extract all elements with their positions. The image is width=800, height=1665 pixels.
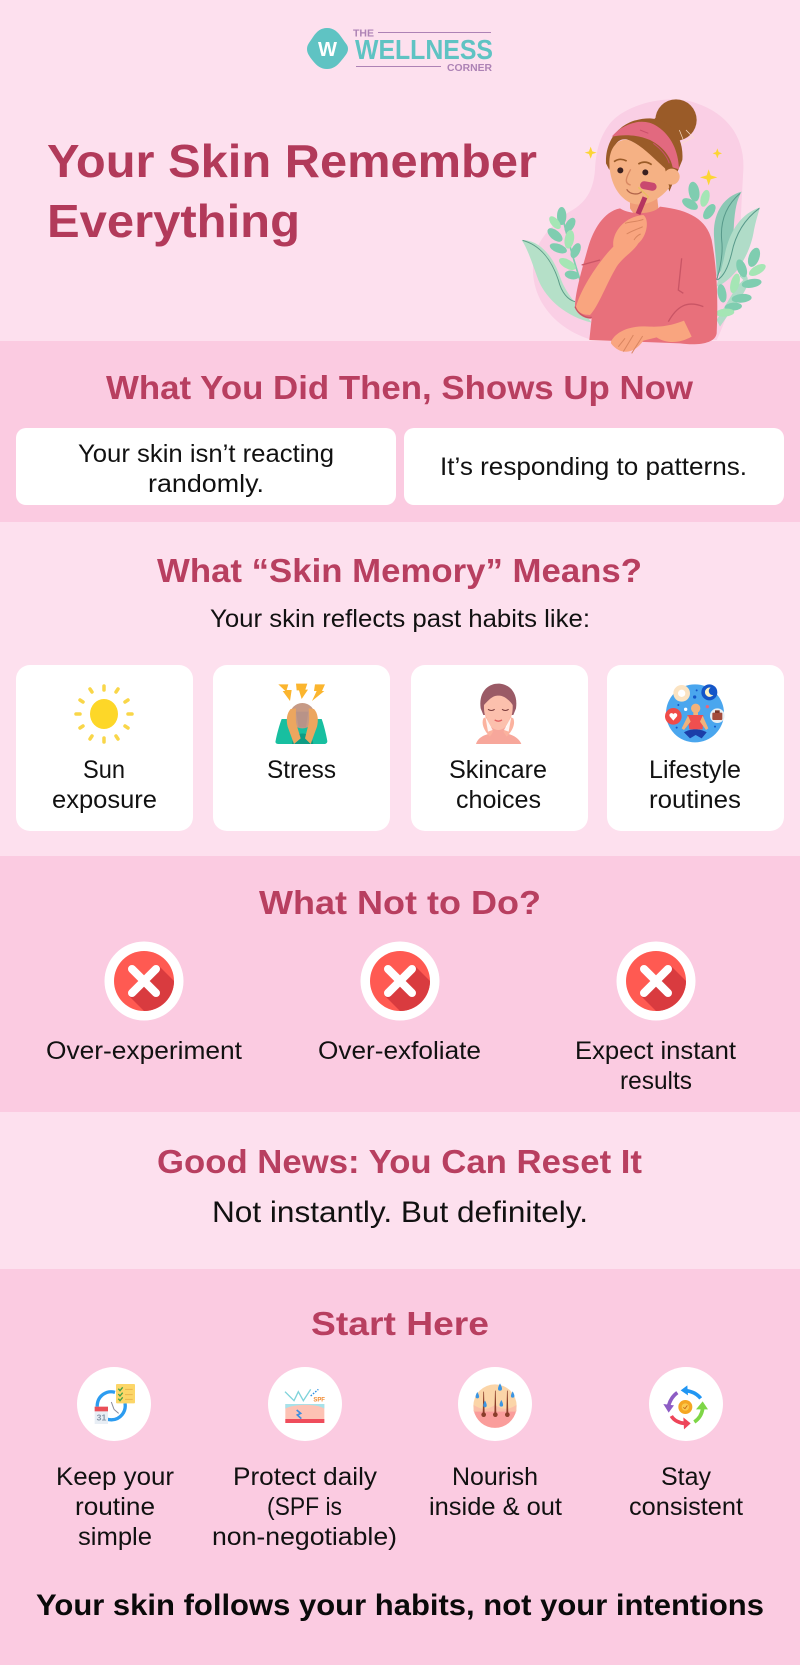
lower hand xyxy=(611,321,692,352)
icon: cross xyxy=(616,942,696,1020)
icon: stressed person xyxy=(275,684,327,744)
heading: Start Here xyxy=(311,1305,489,1342)
logo: The Wellness Corner: WELLNESS xyxy=(355,34,493,65)
card: lifestyle routines: Lifestyle xyxy=(649,756,741,784)
panel: what you did then xyxy=(0,341,800,522)
callout: reacting randomly: Your skin isn’t reacting xyxy=(78,440,334,468)
blob background xyxy=(533,99,743,340)
panel: skin memory xyxy=(0,522,800,856)
card: skincare choices: choices xyxy=(456,786,541,814)
step: stay consistent xyxy=(629,1367,743,1521)
title: Everything xyxy=(47,195,300,247)
panel: what not to do xyxy=(0,856,800,1112)
illustration: woman using face roller xyxy=(522,99,768,353)
step: nourish xyxy=(429,1367,562,1521)
icon: cross xyxy=(104,942,184,1020)
item: expect instant results xyxy=(575,942,736,1095)
card: sun exposure: exposure xyxy=(52,786,157,814)
card: stress: Stress xyxy=(267,756,336,784)
item: over-experiment xyxy=(46,942,242,1065)
card: lifestyle routines: routines xyxy=(649,786,741,814)
hair bun xyxy=(650,99,697,160)
panel: header xyxy=(0,0,800,341)
item: over-exfoliate: Over-exfoliate xyxy=(318,1037,481,1065)
face roller xyxy=(638,181,657,214)
card: stress xyxy=(213,665,390,831)
heading: What You Did Then, Shows Up Now xyxy=(106,369,693,406)
arm and hand xyxy=(576,215,647,315)
step: nourish: inside & out xyxy=(429,1493,562,1521)
step: protect daily: non-negotiable) xyxy=(212,1523,397,1551)
heading: Good News: You Can Reset It xyxy=(157,1143,642,1180)
icon: face care xyxy=(476,684,521,744)
step: keep routine simple: routine xyxy=(75,1493,155,1521)
item: expect instant results: results xyxy=(620,1067,692,1095)
step: protect daily: Protect daily xyxy=(233,1463,378,1491)
item: over-exfoliate xyxy=(318,942,481,1065)
closing statement: Your skin follows your habits, not your intentions xyxy=(36,1589,764,1622)
step: stay consistent: consistent xyxy=(629,1493,743,1521)
plants xyxy=(522,181,768,327)
logo: The Wellness Corner: W xyxy=(318,39,337,61)
text block: Not instantly. But definitely. xyxy=(212,1196,588,1229)
icon: SPF skin: SPF xyxy=(313,1398,325,1404)
card: skincare choices: Skincare xyxy=(449,756,547,784)
logo: The Wellness Corner: CORNER xyxy=(447,62,492,74)
head xyxy=(606,118,683,219)
title: Your Skin Remember xyxy=(47,135,537,187)
logo: The Wellness Corner: THE xyxy=(353,28,374,40)
card: skincare choices xyxy=(411,665,588,831)
icon: lifestyle xyxy=(665,684,725,742)
card: sun exposure xyxy=(16,665,193,831)
callout: patterns xyxy=(404,428,784,505)
sparkles xyxy=(585,147,722,185)
callout: reacting randomly: randomly. xyxy=(148,470,264,498)
step: keep routine simple: simple xyxy=(78,1523,152,1551)
step: protect daily: (SPF is xyxy=(267,1493,342,1521)
panel: good news xyxy=(0,1112,800,1269)
logo: The Wellness Corner xyxy=(307,28,493,74)
icon: calendar and clock xyxy=(95,1384,135,1424)
step: stay consistent: Stay xyxy=(661,1463,711,1491)
item: over-experiment: Over-experiment xyxy=(46,1037,242,1065)
card: lifestyle routines xyxy=(607,665,784,831)
step: keep routine simple xyxy=(56,1367,174,1551)
icon: SPF skin xyxy=(285,1389,325,1423)
item: expect instant results: Expect instant xyxy=(575,1037,736,1065)
icon: sun xyxy=(76,686,132,742)
icon: cycle arrows xyxy=(663,1385,708,1429)
title xyxy=(47,135,537,247)
icon: hydrated skin xyxy=(473,1383,517,1428)
heading: What Not to Do? xyxy=(259,884,541,921)
step: keep routine simple: Keep your xyxy=(56,1463,174,1491)
subheading: Your skin reflects past habits like: xyxy=(210,605,590,633)
step: protect daily xyxy=(212,1367,397,1551)
icon: cross xyxy=(360,942,440,1020)
step: nourish: Nourish xyxy=(452,1463,538,1491)
callout: reacting randomly xyxy=(16,428,396,505)
panel: start here xyxy=(0,1269,800,1665)
card: sun exposure: Sun xyxy=(83,756,125,784)
callout: patterns: It’s responding to patterns. xyxy=(440,453,747,481)
icon: calendar and clock: 31 xyxy=(97,1413,106,1423)
heading: What “Skin Memory” Means? xyxy=(157,552,642,589)
shirt xyxy=(575,207,717,344)
